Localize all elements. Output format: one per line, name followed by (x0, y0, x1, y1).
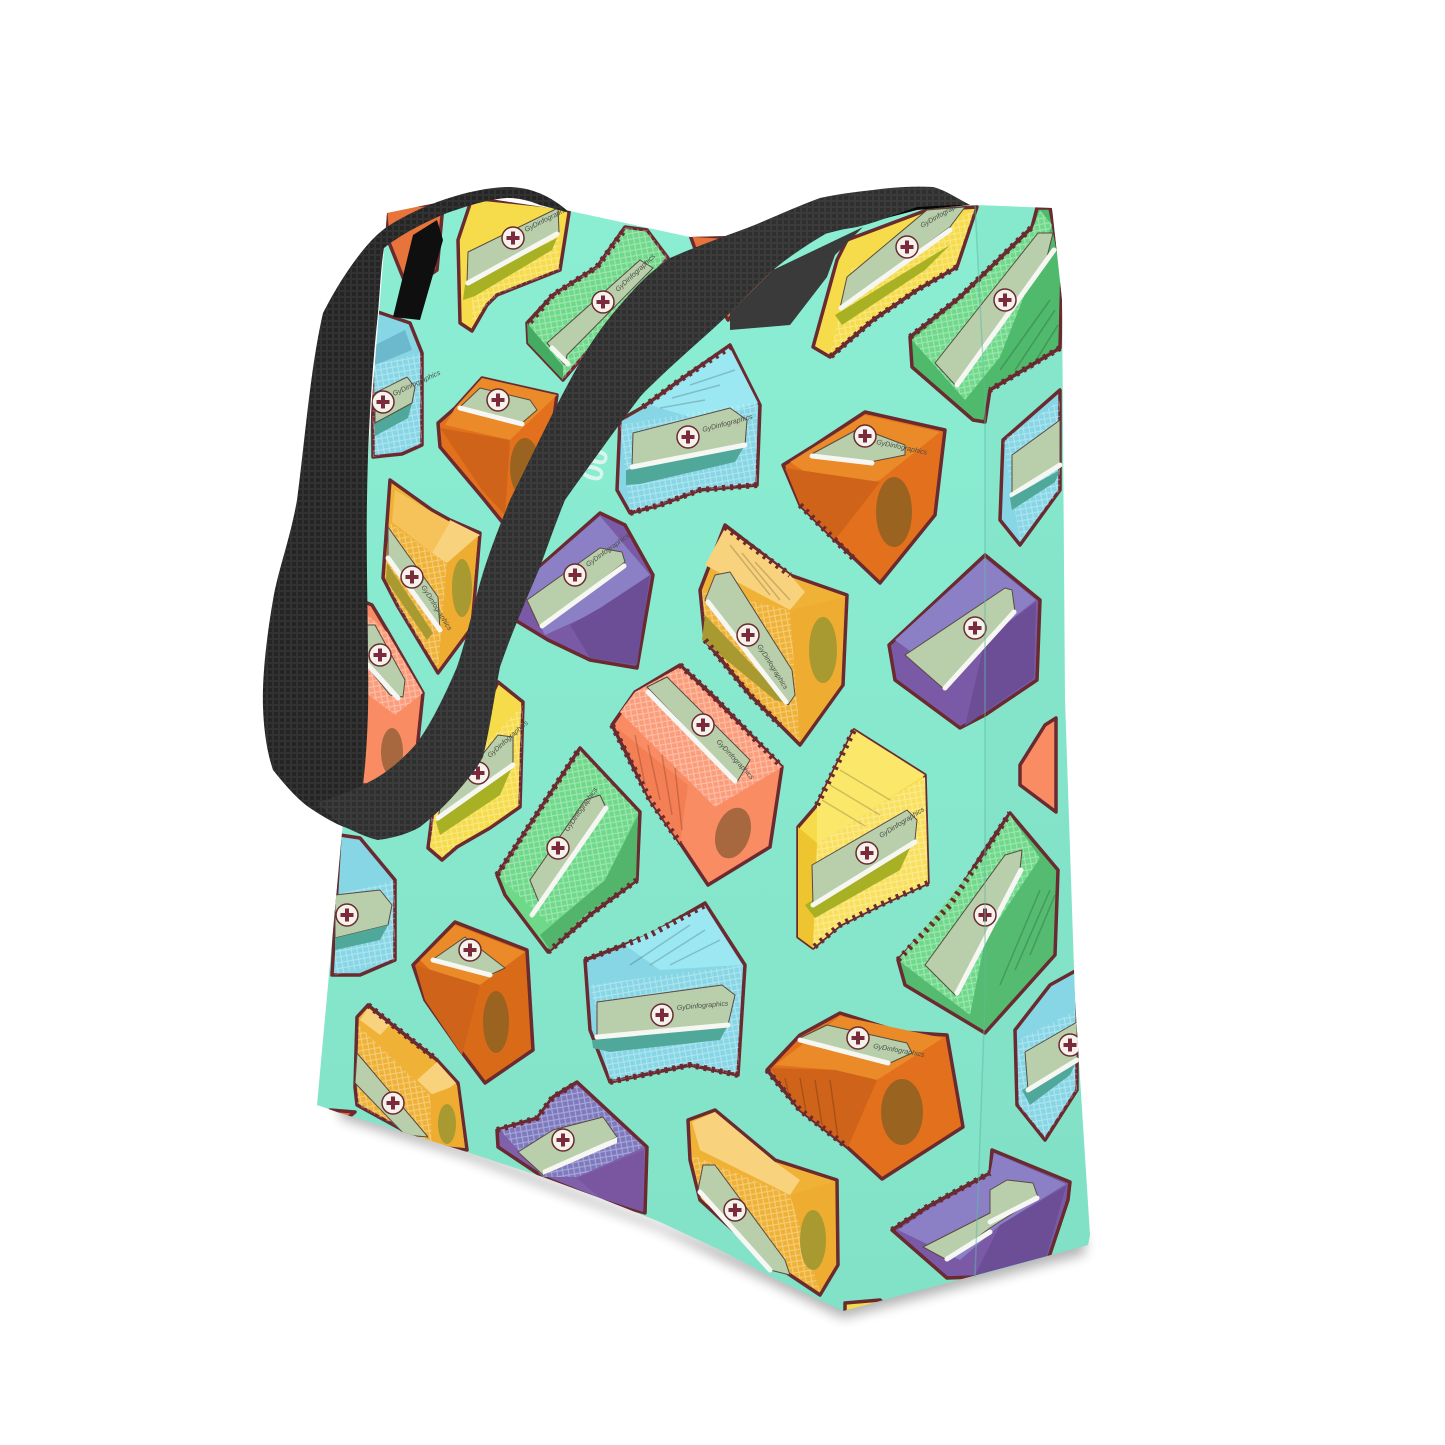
sharpener: blue lower left (332, 835, 395, 975)
sharpener: orange large (783, 412, 945, 583)
sharpener: green centre: GyDinfographics (564, 786, 600, 833)
sharpener: purple lower (497, 1082, 647, 1213)
strap: front band (317, 187, 970, 840)
sharpener: gold centre (700, 525, 847, 745)
sharpener: blue large (617, 345, 760, 513)
sharpener: yellow top: GyDinfographics (524, 204, 573, 234)
sharpener: blue left (372, 310, 442, 457)
sharpener: blue centre lower: GyDinfographics (677, 1000, 729, 1012)
sharpener: blue side lower (1015, 970, 1081, 1140)
sharpener: yellow centre: GyDinfographics (878, 806, 926, 840)
gusset fold line (975, 205, 985, 1277)
sharpener: purple upper (513, 513, 653, 668)
strap attachment tab: left (393, 220, 443, 320)
sharpener: purple side (889, 555, 1040, 728)
sharpener: blue side (1000, 390, 1060, 545)
sharpener: orange lower right (767, 1013, 963, 1179)
sharpener: salmon left (360, 600, 423, 785)
sharpener: gold centre: GyDinfographics (755, 643, 789, 691)
sharpener: purple upper: GyDinfographics (585, 532, 631, 569)
sharpener: green top (527, 227, 668, 380)
sharpener: gold left: GyDinfographics (419, 584, 453, 632)
sharpener: gold left (383, 480, 480, 673)
sharpener: blue left: GyDinfographics (392, 369, 442, 398)
sharpener: gold lower left (355, 1005, 467, 1150)
sharpener: orange lower right: GyDinfographics (873, 1043, 925, 1059)
sharpener: salmon centre: GyDinfographics (715, 739, 755, 782)
sharpener: orange large: GyDinfographics (876, 439, 928, 457)
sharpener: blue large: GyDinfographics (702, 414, 754, 434)
sharpener: orange fragments at top (330, 205, 900, 1320)
sharpener: green top: GyDinfographics (615, 253, 658, 293)
sharpener: orange left-centre (438, 378, 557, 523)
ghost print under strap: 00 (575, 444, 616, 485)
strap: back loop (263, 187, 570, 840)
sharpener: yellow top right (813, 198, 977, 357)
sharpener: gold bottom (688, 1110, 838, 1295)
sharpener: yellow left (428, 682, 530, 860)
tote bag body (317, 196, 1090, 1320)
sharpener: green centre (497, 748, 640, 952)
bag ground shadow (340, 1100, 1085, 1318)
sharpener: salmon centre (612, 665, 782, 885)
sharpener: yellow top (458, 198, 573, 331)
sharpener: blue centre lower (585, 903, 745, 1082)
side gusset panel (975, 205, 1090, 1277)
sharpener: yellow left: GyDinfographics (487, 719, 530, 759)
sharpener: green side top (910, 208, 1062, 422)
strap attachment tab: right (730, 187, 970, 330)
sharpener: yellow centre (798, 730, 928, 948)
sharpener pattern (330, 198, 1081, 1320)
sharpener: purple bottom right (892, 1150, 1070, 1278)
sharpener: orange lower (413, 922, 533, 1083)
sharpener: green side lower (898, 813, 1058, 1033)
sharpener: salmon side (1020, 718, 1056, 812)
sharpener: yellow top right: GyDinfographics (920, 198, 968, 230)
